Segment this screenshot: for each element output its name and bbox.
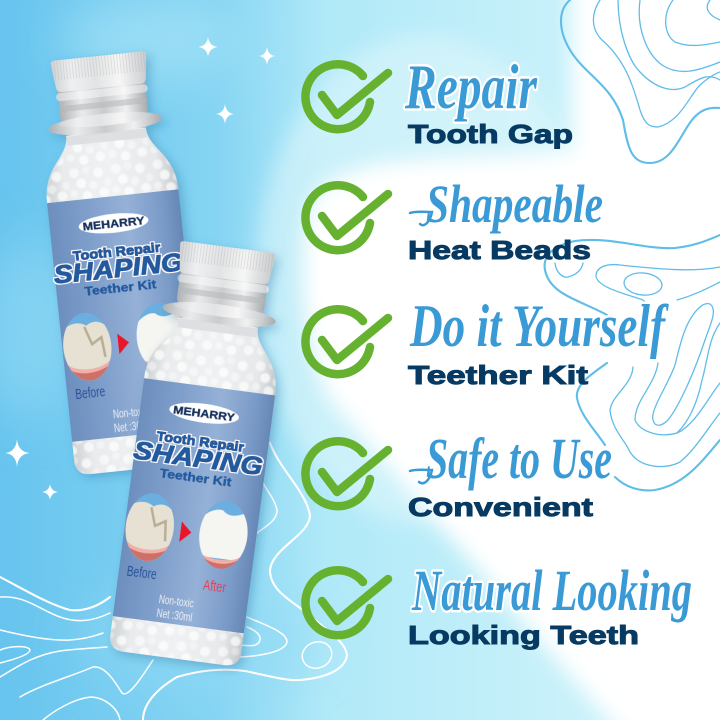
- label: [47, 189, 184, 442]
- captions: [121, 563, 228, 628]
- label: [112, 378, 275, 633]
- icon: check mark: [305, 309, 388, 374]
- captions: Before: [74, 383, 106, 403]
- product: front bottle: [107, 238, 293, 667]
- product name: [130, 426, 266, 493]
- product name: Tooth Repair: [72, 240, 161, 264]
- product name: SHAPING: [52, 248, 184, 290]
- neck and cap: [41, 50, 164, 147]
- benefit: Natural Looking Looking Teeth: [305, 558, 692, 650]
- captions: [74, 376, 180, 439]
- icon: check mark: [305, 185, 388, 250]
- before tooth: [125, 493, 174, 562]
- icon: check mark: [305, 64, 388, 129]
- icon: check mark: [305, 441, 388, 506]
- subheading: Heat Beads: [408, 235, 591, 265]
- captions: Non-toxic: [158, 592, 195, 611]
- subheading: Teether Kit: [408, 360, 588, 390]
- brand: MEHARRY: [82, 215, 146, 233]
- neck and cap: [160, 240, 285, 340]
- captions: Net :30ml: [113, 418, 151, 435]
- subheading: Tooth Gap: [408, 119, 573, 149]
- heading: [410, 426, 612, 491]
- sparkles: [5, 37, 275, 500]
- after tooth: [136, 303, 180, 364]
- captions: Before: [126, 563, 158, 583]
- arrow: [179, 521, 193, 544]
- heading: Shapeable: [426, 174, 603, 234]
- heading: Safe to Use: [426, 426, 612, 491]
- icon: check mark: [305, 570, 388, 635]
- benefit: Repair Tooth Gap: [305, 51, 573, 149]
- bottle body: [108, 314, 284, 667]
- brand: MEHARRY: [172, 404, 236, 424]
- subheading: Convenient: [408, 492, 593, 522]
- product: back bottle: [46, 51, 192, 482]
- benefit: Safe to Use Convenient: [305, 426, 612, 522]
- arrow: [117, 332, 130, 354]
- product name: Teether Kit: [159, 466, 232, 489]
- brand: [78, 210, 149, 236]
- blue contour lines: [545, 0, 720, 490]
- before tooth: [62, 312, 112, 381]
- heading: Repair: [404, 51, 538, 122]
- product name: [51, 237, 186, 302]
- captions: Non-toxic: [112, 404, 149, 421]
- brand: [168, 399, 240, 427]
- captions: After: [202, 577, 227, 597]
- beads: [41, 135, 207, 476]
- subheading: Looking Teeth: [408, 620, 639, 650]
- product name: Tooth Repair: [156, 428, 245, 455]
- bottle body: [40, 125, 207, 476]
- product name: Teether Kit: [84, 277, 157, 299]
- white contour lines: [0, 443, 347, 720]
- product name: SHAPING: [132, 437, 264, 481]
- beads: [108, 324, 282, 667]
- captions: Net :30ml: [156, 606, 193, 624]
- captions: After: [152, 380, 177, 399]
- benefit: Shapeable Heat Beads: [305, 174, 603, 265]
- benefit: Do it Yourself Teether Kit: [305, 293, 669, 390]
- after tooth: [199, 501, 248, 569]
